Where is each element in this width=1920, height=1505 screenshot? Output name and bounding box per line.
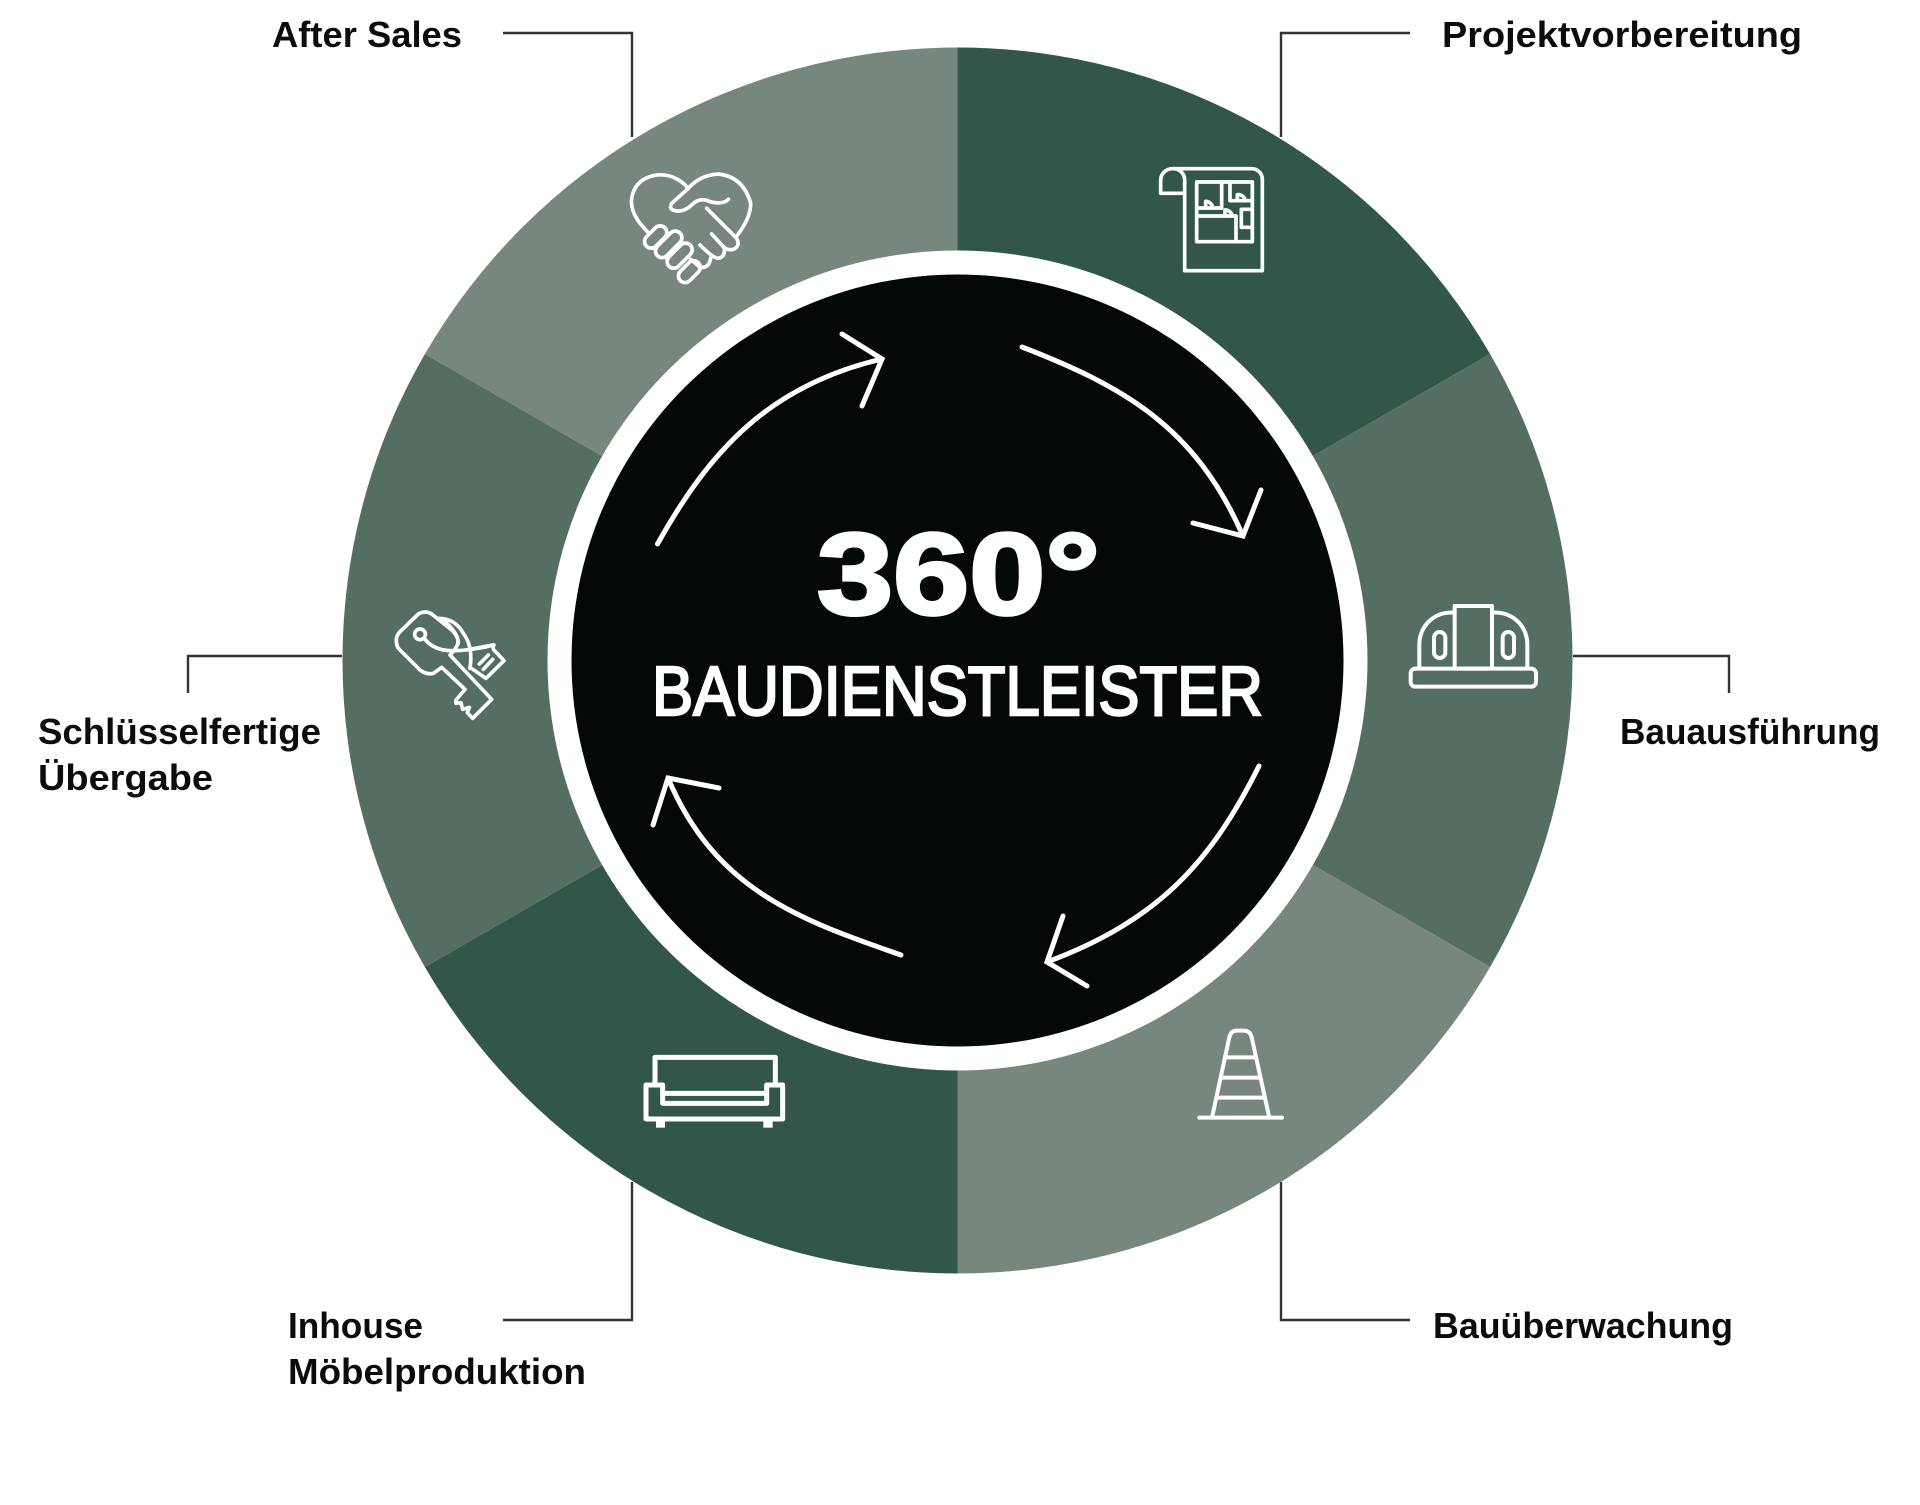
wheel segment: Inhouse Möbelproduktion [425, 660, 957, 1274]
wheel segment: Projektvorbereitung [958, 48, 1490, 660]
label: Projektvorbereitung: Projektvorbereitung [1442, 14, 1802, 55]
label: Bauüberwachung [1281, 1182, 1733, 1346]
wheel segment: Schlüsselfertige Übergabe [343, 354, 958, 967]
label: After Sales [272, 14, 632, 137]
arrow: bottom right [1047, 766, 1259, 986]
arrow: bottom left [653, 778, 901, 955]
label: Bauausführung: Bauausführung [1620, 711, 1880, 752]
label: Inhouse Möbelproduktion [288, 1182, 632, 1392]
label: Bauüberwachung: Bauüberwachung [1433, 1305, 1733, 1346]
icon: hard hat [1411, 606, 1536, 687]
label: Schlüsselfertige Übergabe: Schlüsselfertige [38, 711, 321, 752]
arrow: top left [658, 334, 882, 544]
icon: sofa [646, 1057, 783, 1128]
icon: floor plan [1161, 169, 1262, 271]
label: Schlüsselfertige Übergabe [38, 656, 342, 798]
center title: 360°: 360° [817, 509, 1100, 639]
icon: handshake heart [631, 174, 751, 285]
wheel segment: After Sales [425, 48, 957, 660]
arrow: top right [1022, 347, 1261, 536]
label: Schlüsselfertige Übergabe: Übergabe [38, 757, 213, 798]
wheel segment: Bauausführung [958, 354, 1572, 967]
white ring [548, 250, 1368, 1070]
icon: key with house tag [396, 612, 504, 718]
label: Inhouse Möbelproduktion: Möbelproduktion [288, 1351, 586, 1392]
icon: traffic cone [1199, 1031, 1282, 1118]
wheel segment: Bauüberwachung [958, 660, 1490, 1274]
label: Inhouse Möbelproduktion: Inhouse [288, 1305, 423, 1346]
label: After Sales: After Sales [272, 14, 462, 55]
label: Bauausführung [1573, 656, 1880, 752]
label: Projektvorbereitung [1281, 14, 1802, 137]
center subtitle: BAUDIENSTLEISTER: BAUDIENSTLEISTER [652, 652, 1263, 730]
black center disc [572, 274, 1344, 1046]
